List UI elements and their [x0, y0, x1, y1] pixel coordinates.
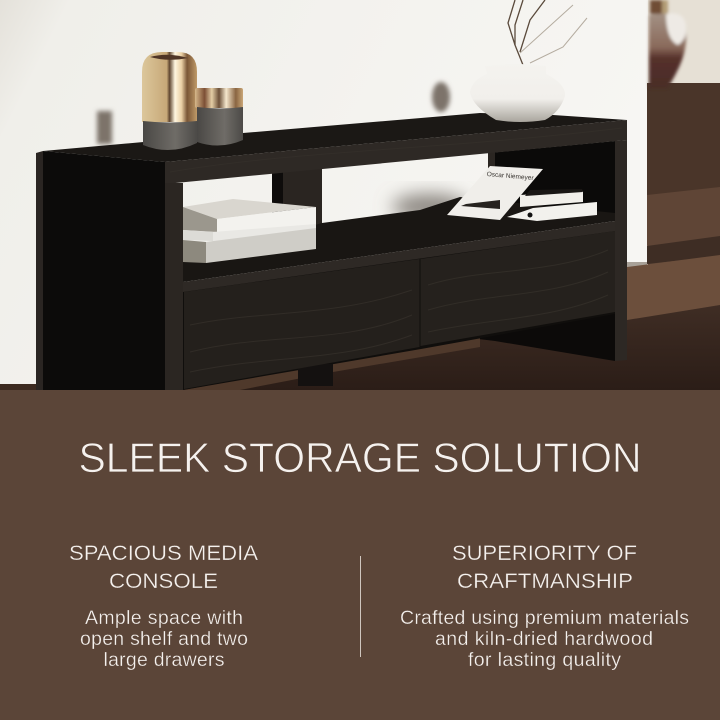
- left column: spacious media console: [69, 542, 258, 671]
- left side panel: [43, 151, 165, 390]
- right post: [615, 140, 627, 361]
- right description: for lasting quality: [468, 649, 621, 671]
- gold and stone candle holders: [142, 52, 243, 150]
- photo: media console in a room: [0, 0, 720, 390]
- left heading: SPACIOUS MEDIA: [69, 542, 258, 565]
- left heading: [69, 542, 258, 593]
- left heading: CONSOLE: [109, 570, 218, 593]
- right description: Crafted using premium materials: [400, 607, 689, 629]
- foot: [298, 364, 333, 386]
- right heading: CRAFTMANSHIP: [457, 570, 633, 593]
- books and magazine right: [447, 166, 597, 221]
- background: right side room with steps: [0, 0, 720, 390]
- central divider: [272, 166, 322, 232]
- wall: [0, 0, 648, 390]
- left description: open shelf and two: [80, 628, 248, 650]
- magazine: [447, 166, 543, 220]
- right column: superiority of craftmanship: [400, 542, 689, 671]
- vase in the background: [649, 0, 686, 88]
- left drawer: [184, 259, 420, 389]
- top surface: [43, 113, 627, 162]
- underside shadow: [470, 308, 615, 361]
- front left stile: [165, 183, 183, 390]
- left description: [80, 607, 248, 671]
- column divider: [360, 556, 361, 657]
- right heading: SUPERIORITY OF: [452, 542, 637, 565]
- white vase with branches: [470, 0, 587, 122]
- right description: and kiln-dried hardwood: [435, 628, 653, 650]
- magazine title: Oscar Niemeyer: [486, 171, 535, 182]
- right description: [400, 607, 689, 671]
- console body: [36, 113, 627, 390]
- left description: Ample space with: [85, 607, 243, 629]
- light band under drawers: [183, 336, 480, 390]
- shelf surface: [183, 197, 615, 282]
- shadows on wall: [97, 82, 450, 144]
- dark right opening: [488, 141, 615, 215]
- wall shadow behind the shelf: [392, 194, 468, 220]
- drawer backing: [183, 229, 615, 390]
- title: SLEEK STORAGE SOLUTION: [78, 434, 642, 481]
- right drawer: [420, 231, 615, 346]
- shelf front strip: [183, 221, 615, 292]
- left description: large drawers: [104, 649, 225, 671]
- bottom info panel: [0, 390, 720, 720]
- right heading: [452, 542, 637, 593]
- top front edge: [165, 120, 627, 184]
- stacked books left: [183, 199, 316, 263]
- wood grain: [170, 128, 622, 372]
